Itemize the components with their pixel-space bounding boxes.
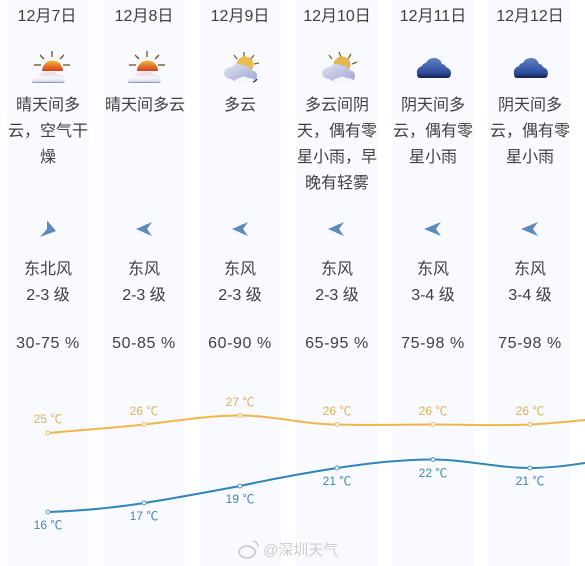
line chart: high temperature: 26 ℃ — [419, 404, 447, 418]
line chart: high temperature: 27 ℃ — [226, 395, 254, 409]
description: 星小雨 — [506, 148, 554, 166]
icon: sun and cloud — [322, 52, 357, 83]
description: 云，偶有零 — [490, 122, 570, 140]
column: 12月12日 — [490, 8, 570, 352]
wind: 2-3 级 — [315, 286, 359, 304]
description — [490, 96, 570, 166]
date: 12月9日 — [211, 8, 269, 25]
wind: 3-4 级 — [508, 286, 552, 304]
icon: wind arrow — [136, 222, 152, 236]
wind: 东风 — [417, 260, 449, 278]
description — [297, 96, 377, 192]
icon: dark cloud — [417, 58, 451, 78]
wind — [411, 260, 455, 304]
wind: 东风 — [514, 260, 546, 278]
line chart: high temperature — [34, 395, 585, 435]
wind — [122, 260, 166, 304]
description — [8, 96, 88, 166]
line chart: low temperature: 16 ℃ — [34, 518, 62, 532]
icon: wind arrow — [232, 222, 248, 236]
column: 12月9日 — [208, 8, 272, 352]
date: 12月7日 — [18, 8, 76, 25]
description: 阴天间多 — [498, 96, 562, 114]
wind: 3-4 级 — [411, 286, 455, 304]
description: 晴天间多 — [16, 96, 80, 114]
humidity: 75-98 % — [498, 335, 562, 352]
line chart: low temperature: 19 ℃ — [226, 492, 254, 506]
column: 12月11日 — [393, 8, 473, 352]
line chart: low temperature: 21 ℃ — [516, 474, 544, 488]
wind: 东风 — [224, 260, 256, 278]
line chart: high temperature: 25 ℃ — [34, 412, 62, 426]
humidity: 65-95 % — [305, 335, 369, 352]
date: 12月10日 — [303, 8, 371, 25]
column: 12月7日 — [8, 8, 88, 352]
humidity: 50-85 % — [112, 335, 176, 352]
column: 12月10日 — [297, 8, 377, 352]
icon: dark cloud — [514, 58, 548, 78]
wind: 东北风 — [24, 260, 72, 278]
icon: wind arrow — [521, 222, 538, 236]
humidity: 75-98 % — [401, 335, 465, 352]
humidity: 30-75 % — [16, 335, 80, 352]
description: 多云间阴 — [305, 96, 369, 114]
icon: wind arrow — [424, 222, 441, 236]
description — [393, 96, 473, 166]
wind — [508, 260, 552, 304]
description: 星小雨 — [409, 148, 457, 166]
watermark: @深圳天气 — [263, 542, 338, 559]
wind — [24, 260, 72, 304]
line chart: low temperature: 21 ℃ — [323, 474, 351, 488]
column: 12月8日 — [105, 8, 185, 352]
description: 云，偶有零 — [393, 122, 473, 140]
wind — [315, 260, 359, 304]
wind: 2-3 级 — [218, 286, 262, 304]
line chart: high temperature: 26 ℃ — [130, 404, 158, 418]
icon: sun behind cloud — [128, 51, 165, 83]
line chart: high temperature: 26 ℃ — [516, 404, 544, 418]
icon: sun behind cloud — [32, 51, 70, 83]
date: 12月8日 — [115, 8, 173, 25]
line chart: high temperature: 26 ℃ — [323, 404, 351, 418]
wind — [218, 260, 262, 304]
wind: 2-3 级 — [122, 286, 166, 304]
description: 云，空气干 — [8, 122, 88, 140]
icon: sun and cloud — [224, 52, 259, 83]
line chart: low temperature — [34, 458, 585, 532]
line chart: low temperature: 17 ℃ — [130, 509, 158, 523]
humidity: 60-90 % — [208, 335, 272, 352]
description: 阴天间多 — [401, 96, 465, 114]
wind: 东风 — [321, 260, 353, 278]
date: 12月12日 — [496, 8, 564, 25]
description: 晚有轻雾 — [305, 174, 369, 192]
description: 多云 — [224, 96, 256, 114]
icon: wind arrow — [40, 220, 56, 237]
description: 燥 — [40, 148, 56, 166]
wind: 2-3 级 — [26, 286, 70, 304]
wind: 东风 — [128, 260, 160, 278]
date: 12月11日 — [400, 8, 466, 25]
description: 星小雨，早 — [297, 148, 377, 166]
line chart: low temperature: 22 ℃ — [419, 466, 447, 480]
description: 晴天间多云 — [105, 96, 185, 114]
icon: wind arrow — [328, 222, 344, 236]
description: 天，偶有零 — [297, 122, 377, 140]
